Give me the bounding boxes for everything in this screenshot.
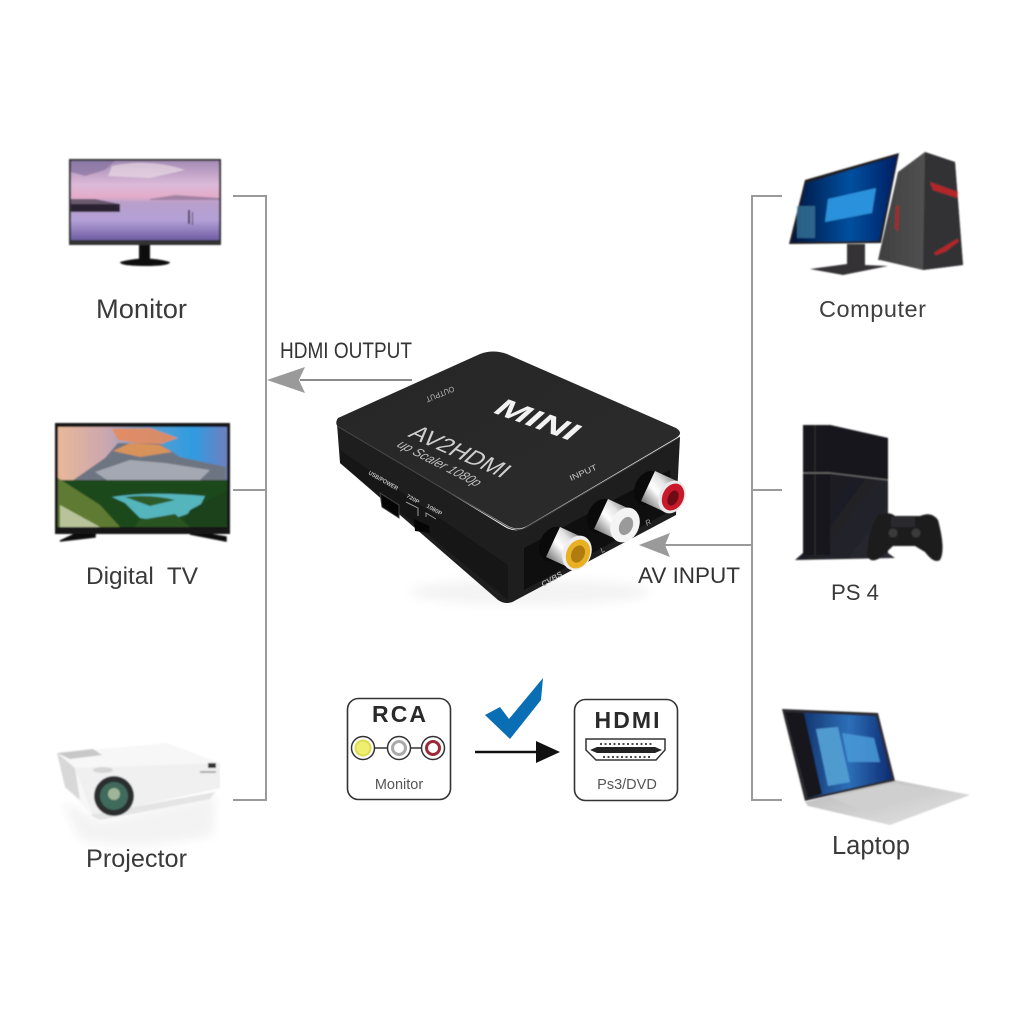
adapter: AV2HDMI mini converter: AV2HDMI bbox=[403, 421, 518, 482]
controller bbox=[867, 513, 943, 561]
label: laptop: Laptop bbox=[832, 832, 910, 860]
adapter: AV2HDMI mini converter: OUTPUT bbox=[424, 384, 456, 404]
label: computer: Computer bbox=[819, 296, 926, 322]
side text and ports: USB/POWER bbox=[367, 471, 399, 493]
device: monitor bbox=[69, 159, 221, 266]
panel: RCA input bbox=[348, 698, 450, 800]
adapter: AV2HDMI mini converter: 720P bbox=[405, 494, 420, 506]
top face bbox=[336, 352, 680, 528]
adapter: AV2HDMI mini converter: 1080P bbox=[425, 504, 443, 517]
arrow: HDMI output bbox=[267, 367, 412, 393]
adapter: AV2HDMI mini converter: up Scaler 1080p bbox=[394, 438, 486, 489]
HDMI connector icon bbox=[586, 739, 665, 760]
arrow: RCA to HDMI bbox=[475, 741, 560, 763]
monitor base bbox=[810, 244, 888, 275]
right connector bracket bbox=[752, 196, 782, 800]
tower bbox=[878, 152, 963, 270]
panel: HDMI output bbox=[574, 700, 678, 800]
RCA connector icons bbox=[352, 736, 444, 760]
adapter: AV2HDMI mini converter bbox=[336, 352, 691, 605]
arrow: AV input bbox=[639, 533, 752, 557]
adapter: AV2HDMI mini converter: INPUT bbox=[568, 463, 598, 483]
device: projector bbox=[57, 743, 220, 845]
device: digital TV bbox=[55, 423, 230, 541]
body sides bbox=[337, 424, 680, 603]
screen bbox=[789, 153, 899, 244]
HDMI caption: Ps3/DVD bbox=[597, 777, 657, 793]
label: monitor: Monitor bbox=[96, 294, 187, 324]
label: digital TV: Digital TV bbox=[86, 563, 198, 590]
RCA heading: RCA bbox=[372, 701, 426, 727]
RCA port: yellow bbox=[534, 522, 597, 575]
RCA port: red bbox=[629, 466, 691, 518]
top text: MINI bbox=[486, 394, 590, 445]
left connector bracket bbox=[233, 196, 266, 800]
adapter: AV2HDMI mini converter: CVBS bbox=[540, 569, 564, 589]
label: AV input: AV INPUT bbox=[638, 563, 740, 588]
label: HDMI output: HDMI OUTPUT bbox=[280, 338, 412, 363]
device: computer bbox=[789, 152, 963, 275]
label: PS 4: PS 4 bbox=[831, 580, 879, 605]
device: laptop bbox=[782, 709, 970, 825]
device: PS4 bbox=[795, 425, 943, 561]
adapter: AV2HDMI mini converter: R bbox=[644, 517, 653, 528]
RCA port: white bbox=[582, 494, 645, 547]
HDMI heading: HDMI bbox=[594, 707, 660, 733]
label: projector: Projector bbox=[86, 845, 187, 873]
RCA caption: Monitor bbox=[375, 777, 423, 793]
adapter: AV2HDMI mini converter: L bbox=[598, 545, 607, 555]
icon: blue check mark bbox=[485, 678, 543, 739]
